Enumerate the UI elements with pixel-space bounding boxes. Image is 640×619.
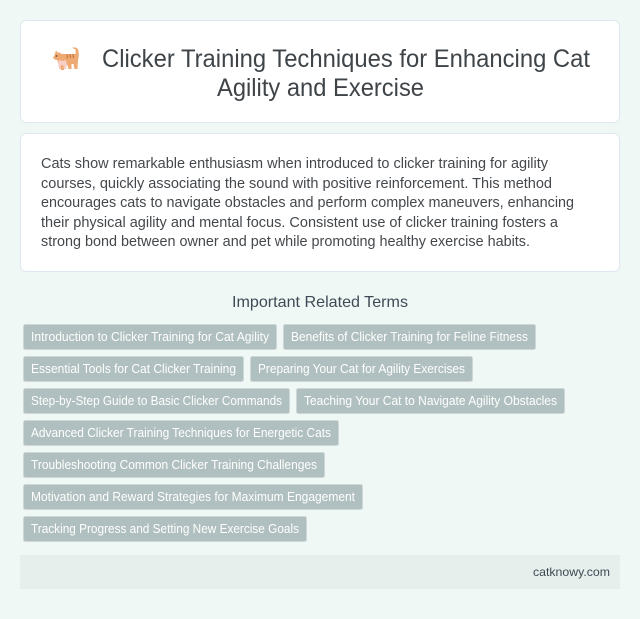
tag: Motivation and Reward Strategies for Maximum Engagement [31, 489, 355, 504]
tag: Troubleshooting Common Clicker Training Challenges [31, 457, 317, 472]
intro paragraph: courses, quickly associating the sound with positive reinforcement. This method [41, 175, 552, 192]
tag: Benefits of Clicker Training for Feline Fitness [291, 329, 528, 344]
tag: Advanced Clicker Training Techniques for Energetic Cats [31, 425, 331, 440]
tag [296, 388, 564, 414]
tag: Step-by-Step Guide to Basic Clicker Commands [31, 393, 282, 408]
tag: Essential Tools for Cat Clicker Training [31, 361, 236, 376]
tag: Introduction to Clicker Training for Cat Agility [31, 329, 270, 344]
tag [24, 452, 324, 478]
tag [284, 324, 536, 350]
panel: title card [20, 20, 620, 122]
intro paragraph: strong bond between owner and pet while promoting healthy exercise habits. [41, 233, 530, 250]
title text [102, 45, 590, 102]
tag [24, 484, 362, 510]
tag: Preparing Your Cat for Agility Exercises [258, 361, 465, 376]
intro paragraph: encourages cats to navigate obstacles and perform complex maneuvers, enhancing [41, 194, 574, 211]
footer bar [20, 555, 620, 589]
tag [24, 420, 338, 446]
tag [250, 356, 472, 382]
intro paragraph: their physical agility and mental focus. Consistent use of clicker training fosters a [41, 214, 559, 231]
intro paragraph [41, 155, 574, 250]
tag: Tracking Progress and Setting New Exercise Goals [31, 521, 299, 536]
tag list [24, 324, 564, 542]
tag [24, 388, 290, 414]
icon: cat [53, 47, 79, 70]
footer site name: catknowy.com [533, 565, 610, 579]
intro paragraph: Cats show remarkable enthusiasm when introduced to clicker training for agility [41, 155, 548, 172]
tag [24, 516, 306, 542]
title text: Agility and Exercise [217, 74, 424, 102]
heading: important related terms: Important Related Terms [232, 294, 408, 311]
panel: introduction text [20, 134, 620, 272]
tag: Teaching Your Cat to Navigate Agility Obstacles [304, 393, 557, 408]
title text: Clicker Training Techniques for Enhancing Cat [102, 45, 590, 73]
tag [24, 324, 276, 350]
tag [24, 356, 244, 382]
